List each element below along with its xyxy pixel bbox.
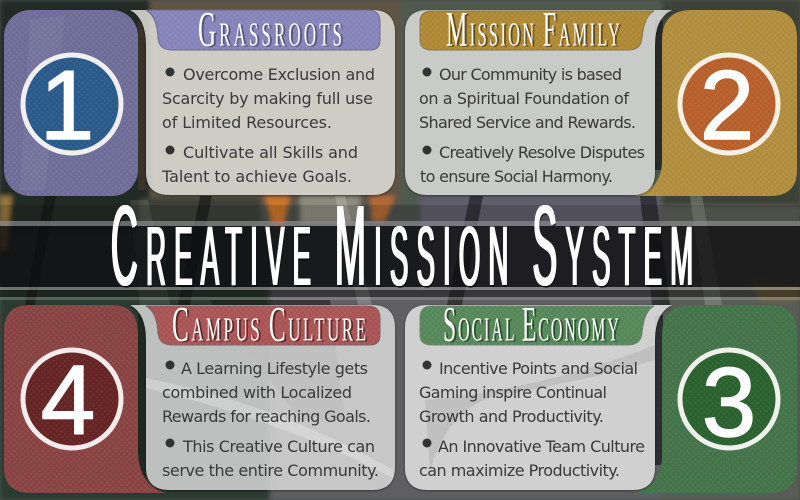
- bullet text 3: can maximize Productivity.: [419, 461, 620, 480]
- bullet text 1: Scarcity by making full use: [162, 89, 373, 108]
- bullet text 4: Rewards for reaching Goals.: [162, 407, 371, 426]
- tile 2: [634, 10, 797, 196]
- bullet text 4: This Creative Culture can: [182, 437, 375, 456]
- bullet text 3: Incentive Points and Social: [439, 359, 638, 378]
- number badge 4: [23, 345, 121, 455]
- bullet text 1: of Limited Resources.: [162, 113, 332, 132]
- number badge 1: 1: [40, 50, 94, 160]
- heading: Social Economy: SOCIAL ECONOMY: [443, 297, 619, 352]
- number badge 3: 3: [702, 347, 756, 457]
- tile 3: [634, 305, 797, 493]
- text panel 1: [130, 10, 395, 195]
- bullet text 1: Cultivate all Skills and: [183, 143, 358, 162]
- heading tab 3: [420, 306, 654, 345]
- number badge 1: [23, 50, 121, 160]
- title: CREATIVE MISSION SYSTEM: [112, 184, 694, 311]
- heading: Mission Family: MISSION FAMILY: [448, 3, 622, 58]
- dark gaps beside the number tiles: [138, 12, 147, 190]
- bullet text 4: [162, 359, 379, 480]
- bullet text 4: serve the entire Community.: [162, 461, 379, 480]
- bullet text 1: [161, 65, 375, 186]
- bullet text 3: [419, 359, 645, 480]
- bullet text 2: [419, 65, 645, 186]
- heading: Mission Family: MISSION FAMILY: [446, 2, 620, 57]
- heading: Campus Culture: CAMPUS CULTURE: [172, 296, 366, 352]
- panel: 2 Mission Family: [405, 2, 797, 196]
- number badge 4: 4: [41, 345, 95, 455]
- central title band: [0, 205, 800, 300]
- bullet text 3: An Innovative Team Culture: [438, 437, 645, 456]
- bullet text 1: Overcome Exclusion and: [183, 65, 375, 84]
- bullet text 1: Talent to achieve Goals.: [161, 167, 352, 186]
- bullet text 2: on a Spiritual Foundation of: [419, 89, 629, 108]
- tile 1: [4, 10, 138, 196]
- heading: Campus Culture: CAMPUS CULTURE: [174, 297, 368, 353]
- bullet text 4: combined with Localized: [162, 383, 352, 402]
- panel: 4 Campus Culture: [4, 296, 395, 493]
- bullet text 3: Growth and Productivity.: [419, 407, 604, 426]
- heading tab 1: [146, 10, 380, 50]
- number badge 3: [680, 347, 778, 457]
- bullet text 2: Creatively Resolve Disputes: [439, 143, 645, 162]
- bullet text 3: Gaming inspire Continual: [419, 383, 607, 402]
- bullet text 2: to ensure Social Harmony.: [420, 167, 613, 186]
- heading: Grassroots: GRASSROOTS: [198, 1, 342, 57]
- heading tab 2: [420, 11, 654, 50]
- number badge 2: 2: [700, 50, 754, 160]
- bullet text 2: Our Community is based: [439, 65, 622, 84]
- title: CREATIVE MISSION SYSTEM: [110, 182, 692, 309]
- bullet text 4: A Learning Lifestyle gets: [181, 359, 368, 378]
- heading: Grassroots: GRASSROOTS: [200, 2, 344, 58]
- panel: 1 Grassroots: [4, 1, 395, 196]
- heading tab 4: [146, 306, 380, 345]
- tile 4: [4, 305, 166, 493]
- panel: 3 Social Economy: [405, 297, 797, 493]
- number badge 2: [680, 50, 778, 160]
- bullet text 2: Shared Service and Rewards.: [419, 113, 636, 132]
- title: CREATIVE MISSION SYSTEM: [112, 182, 694, 309]
- text panel 4: [130, 305, 395, 490]
- text panel 3: [405, 305, 672, 490]
- heading: Social Economy: SOCIAL ECONOMY: [445, 298, 621, 353]
- text panel 2: [405, 10, 672, 195]
